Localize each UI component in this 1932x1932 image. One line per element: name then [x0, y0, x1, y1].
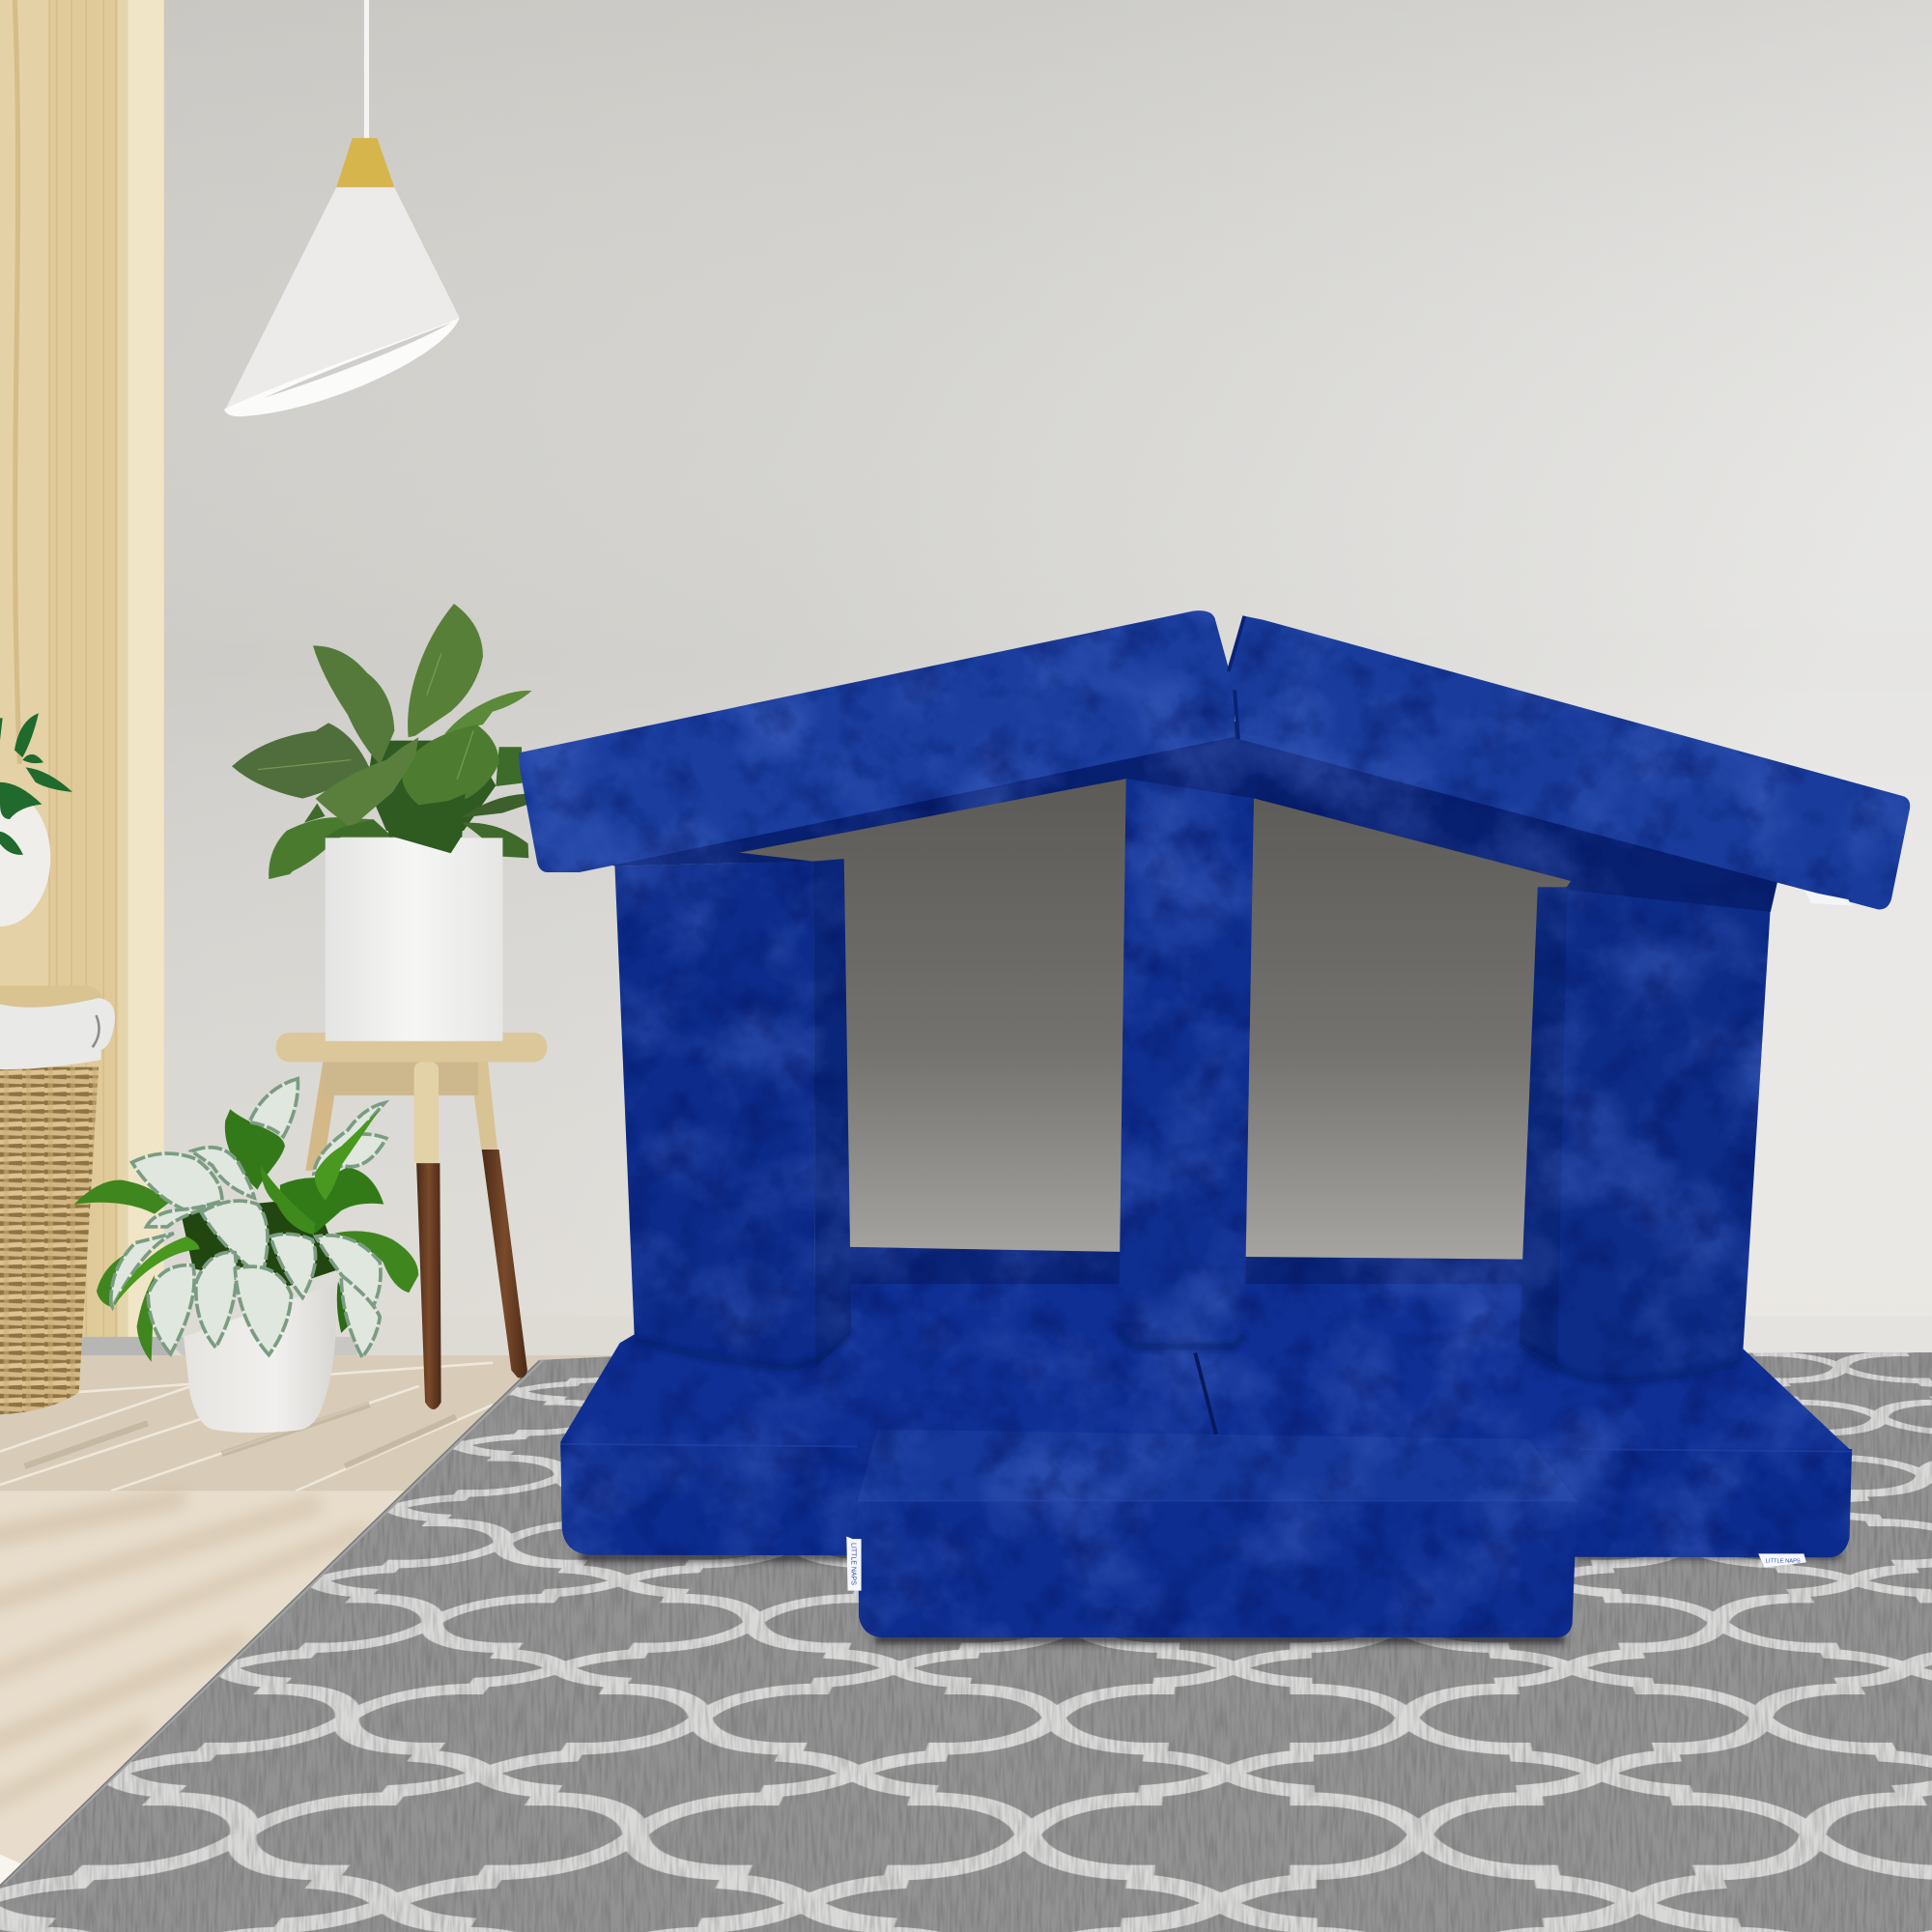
stool back leg [305, 1062, 339, 1171]
fabric tag right: LITTLE NAPS [1766, 1558, 1801, 1564]
base cushions top [560, 1284, 1852, 1457]
wall baseboards [80, 1316, 1932, 1381]
fabric tag roof [1805, 891, 1852, 906]
bright leaves [113, 1109, 380, 1307]
cushion edge highlights [560, 1444, 1852, 1501]
wall planter with leaves [0, 713, 72, 926]
blue play couch house [519, 611, 1910, 1637]
base cushions front [560, 1444, 1852, 1557]
wicker basket [0, 985, 115, 1414]
stool [276, 1033, 547, 1409]
silver leaves [111, 1079, 386, 1357]
fabric tag left [846, 1537, 862, 1591]
stool top [276, 1033, 547, 1062]
green leaves [74, 1109, 418, 1362]
wood wall panel [0, 0, 164, 1343]
patterned grey rug [0, 1352, 1932, 1932]
back shadow strip [848, 1247, 1528, 1380]
sofa shadow on rug [579, 1552, 1842, 1644]
left pillar [614, 859, 851, 1368]
pendant lamp [224, 0, 460, 416]
window backdrop seen through the house [739, 764, 1589, 1282]
stool front leg [414, 1062, 441, 1409]
large plant foliage [232, 604, 532, 879]
leaves over pot [269, 805, 464, 879]
small plant foliage [74, 1079, 418, 1362]
roof right slab [1229, 616, 1910, 909]
roof ridge highlight [1229, 616, 1244, 739]
pillar contact creases [635, 1328, 1743, 1381]
stool right leg [469, 1062, 527, 1378]
stool apron [323, 1060, 478, 1095]
rug weave texture and edge [0, 1352, 1932, 1932]
wood floor [0, 1355, 739, 1886]
small white pot [184, 1284, 336, 1433]
fabric tag right [1758, 1553, 1806, 1567]
front cushion [858, 1430, 1577, 1637]
large potted plant [232, 604, 532, 1041]
small potted plant [74, 1079, 418, 1433]
large white pot [326, 838, 502, 1041]
roof left slab [519, 611, 1235, 872]
fabric tag left: LITTLE NAPS [849, 1543, 856, 1585]
right pillar [1520, 887, 1771, 1381]
rug trellis pattern [0, 1352, 1932, 1932]
wall [164, 0, 1932, 1324]
center column [1119, 770, 1254, 1347]
cushion seam [1195, 1353, 1216, 1435]
under roof beam [604, 721, 1780, 912]
